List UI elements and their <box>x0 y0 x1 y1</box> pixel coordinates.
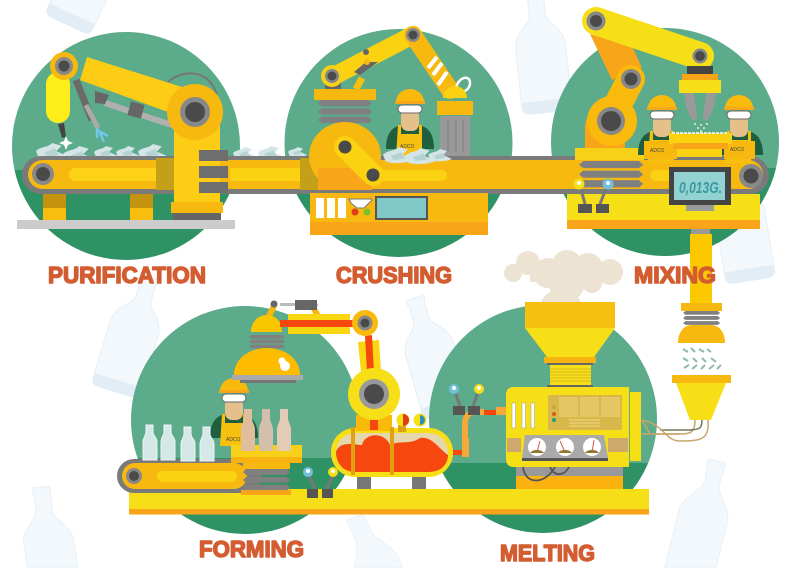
heading: purification: PURIFICATION <box>48 262 206 288</box>
forming arm <box>280 310 381 372</box>
worker: forming <box>210 378 258 446</box>
heading: mixing: MIXING <box>634 262 716 288</box>
heading: crushing: CRUSHING <box>336 262 452 288</box>
heading: forming: FORMING <box>199 536 304 562</box>
scale display <box>669 167 731 211</box>
apron logo: forming: ADCO <box>226 437 241 443</box>
worker: crushing <box>386 89 434 157</box>
workers: mixing <box>638 95 763 163</box>
apron logo: crushing: ADCO <box>400 144 415 150</box>
wires to melting <box>642 420 708 441</box>
molten glass tank <box>331 368 453 489</box>
panel: forming circle <box>131 306 359 534</box>
crushed glass at worker <box>383 147 452 164</box>
robot arm: purification <box>46 52 228 220</box>
lower base <box>129 489 649 514</box>
forming conveyor <box>117 459 262 493</box>
scale display: 0,013G. <box>679 180 722 197</box>
apron logo: mixing left: ADCO <box>650 148 665 154</box>
tank gauges <box>396 414 426 432</box>
crushing machine and arm <box>309 28 473 190</box>
melting furnace <box>506 302 641 489</box>
panel: mixing circle <box>551 28 779 256</box>
amber bottles <box>241 409 291 451</box>
main upper conveyor <box>22 156 769 194</box>
mixing tray and boxes <box>644 133 755 159</box>
forming press stand <box>231 445 302 495</box>
crushing console <box>310 193 488 235</box>
heading: melting: MELTING <box>500 540 595 566</box>
mixing console <box>567 194 760 229</box>
clear bottles <box>143 425 214 461</box>
forming lamp press <box>232 300 320 383</box>
smoke cloud <box>504 250 623 303</box>
upper base under purification <box>17 194 235 229</box>
feed pipe and dispenser <box>672 229 731 420</box>
panel: purification circle <box>12 32 240 260</box>
crushed glass on conveyor <box>36 143 580 163</box>
apron logo: mixing right: ADCO <box>730 147 745 153</box>
panel: melting circle <box>429 305 657 533</box>
levers: forming <box>303 467 338 498</box>
robot arm: mixing <box>575 12 721 187</box>
pipes and levers: melting <box>449 384 506 457</box>
panel: crushing circle <box>284 29 513 258</box>
levers: mixing <box>574 178 614 213</box>
